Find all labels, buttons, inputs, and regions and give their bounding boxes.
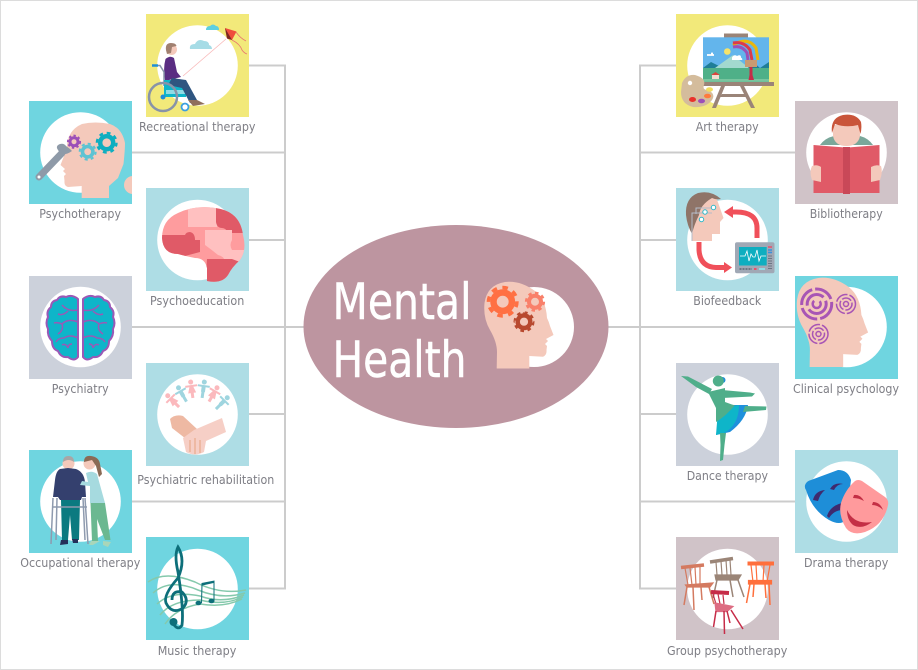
icon: person in wheelchair [149, 43, 205, 111]
icon: paper chain people [162, 379, 233, 413]
icon: chair taupe [710, 558, 744, 598]
panel: music therapy [146, 537, 249, 658]
panel: dance therapy [676, 363, 779, 483]
panel: occupational therapy [20, 450, 141, 570]
icon: monitor [735, 242, 774, 273]
icon: pink mask [840, 480, 888, 533]
icon: treble clef [166, 547, 186, 628]
icon: paint palette [681, 75, 713, 107]
title: Mental [332, 273, 472, 331]
panel: psychiatry [29, 276, 132, 396]
label: Clinical psychology [793, 381, 900, 396]
panel: biofeedback [676, 188, 779, 308]
panel: group psychotherapy [667, 537, 788, 658]
icon: ballet dancer [681, 376, 766, 461]
icon: head with sensors [686, 192, 724, 241]
central topic: Mental Health [304, 225, 608, 428]
label: Group psychotherapy [667, 643, 788, 658]
panel: drama therapy [795, 450, 898, 570]
panel: bibliotherapy [795, 101, 898, 221]
icon: puzzle brain [162, 207, 244, 282]
arrows: feedback loop [699, 206, 757, 273]
title: Health [332, 331, 466, 389]
icon: holding hands [170, 415, 226, 454]
label: Biofeedback [693, 293, 762, 308]
label: Music therapy [158, 643, 237, 658]
panel: art therapy [676, 14, 779, 134]
label: Psychoeducation [150, 293, 244, 308]
label: Psychiatry [52, 381, 109, 396]
label: Occupational therapy [20, 555, 141, 570]
panel: clinical psychology [793, 276, 900, 396]
label: Dance therapy [687, 468, 769, 483]
icon: carer with man on walker [51, 456, 111, 547]
icon: man reading book [810, 115, 882, 194]
label: Art therapy [696, 119, 759, 134]
icon: music notes [196, 580, 214, 605]
icon: head with wrench and gears [38, 122, 142, 198]
icon: head with spirals [797, 278, 868, 367]
label: Recreational therapy [139, 119, 256, 134]
label: Bibliotherapy [810, 206, 883, 221]
icon: blue mask [805, 470, 851, 523]
title [332, 273, 472, 389]
icon: clouds and kite [183, 24, 247, 76]
icon: chair crimson [711, 592, 743, 634]
icon: easel with painting [703, 34, 774, 108]
panel: psychotherapy [29, 101, 142, 221]
icon: chair orange [746, 564, 774, 605]
icon: brain [46, 296, 114, 360]
label: Drama therapy [804, 555, 889, 570]
panel: psychoeducation [146, 188, 250, 308]
label: Psychiatric rehabilitation [137, 472, 274, 487]
icon: head with gears [484, 282, 574, 368]
icon: staff lines [148, 576, 246, 624]
panel: psychiatric rehabilitation [137, 363, 274, 487]
icon: chair salmon [681, 565, 714, 610]
label: Psychotherapy [39, 206, 122, 221]
panel: recreational therapy [139, 14, 256, 134]
